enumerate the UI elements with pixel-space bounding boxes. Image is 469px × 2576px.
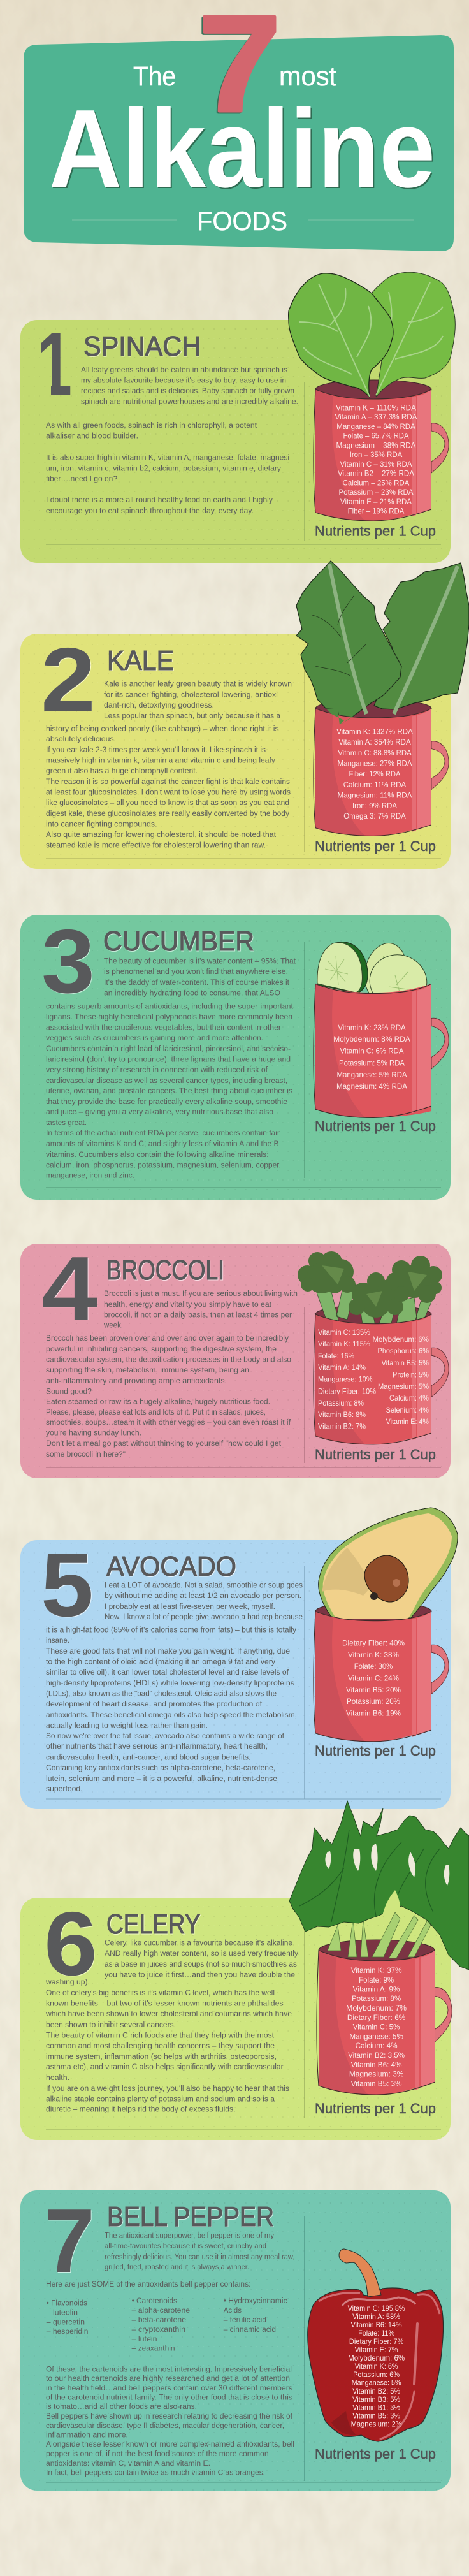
body text: AND really high water content, so is used very frequently [105,1949,299,1958]
body text: you have to juice it first…and then you have double the [105,1970,295,1979]
mug nutrient list: left column: Folate: 16% [318,1351,354,1360]
mug nutrient list: Vitamin B6: 19% [346,1709,401,1718]
mug nutrient list: Manganese: 27% RDA [338,759,412,768]
mug nutrient list: Manganese – 84% RDA [336,422,415,431]
body text [46,957,296,1180]
nutrient list: Vitamin B6: 14% [351,2320,402,2329]
number 6: 6 [44,1893,97,1995]
heading: broccoli: BROCCOLI [106,1255,224,1286]
body text: which have been shown to lower cholesterol and coumarins which have [45,2009,292,2018]
mug nutrient list: right column: Magnesium: 5% [378,1382,429,1391]
mug nutrient list: Manganese: 5% [349,2032,403,2041]
body text: I doubt there is a more all round healthy food on earth and I highly [46,495,273,504]
mug nutrient list: Omega 3: 7% RDA [343,811,406,820]
body text: antioxidants. These beneficial omega oils also help speed the metabolism, [46,1710,297,1719]
body text: is phenomenal and you won't find that anywhere else. [104,967,288,976]
body text: Broccoli is just a must. If you are serious about living with [104,1289,298,1298]
body text: steamed kale is more effective for cholesterol lowering than raw. [46,840,266,849]
body text [46,365,298,515]
mug nutrient list: Iron – 35% RDA [350,450,402,459]
body text: dant-rich, detoxifying goodness. [104,701,214,709]
mug nutrient list: Fiber: 12% RDA [349,769,400,778]
antioxidant list: carotenoids: – cryptoxanthin [132,2325,185,2334]
mug nutrient list [346,1966,407,2088]
number 3: 3 [41,911,95,1012]
body text: In terms of the actual nutrient RDA per serve, cucumbers contain fair [46,1128,280,1137]
caption: nutrients per cup: Nutrients per 1 Cup [315,838,436,854]
body text: history of being cooked poorly (like cabbage) – when done right it is [46,724,279,733]
caption: nutrients per cup: Nutrients per 1 Cup [315,2100,436,2116]
body text: health, energy and vitality you simply have to eat [104,1300,272,1309]
caption: nutrients per cup: Nutrients per 1 Cup [315,2446,436,2462]
heading: kale: KALE [107,645,174,676]
mug nutrient list: Dietary Fiber: 40% [342,1639,405,1648]
mug nutrient list [335,403,417,515]
body text: been shown to inhibit several cancers. [46,2020,176,2029]
body text: common and most challenging health concerns – they support the [46,2041,275,2050]
banner panel [24,35,454,251]
closing body text: antioxidants: vitamin C, vitamin A and vitamin E. [46,2459,210,2468]
body text: Kale is another leafy green beauty that is widely known [104,680,292,688]
mug nutrient list: Potassium: 20% [347,1697,400,1706]
closing body text: to our health cartenoids are highly researched and get a lot of attention [46,2374,290,2383]
mug nutrient list: right column: Phosphorus: 6% [377,1346,429,1355]
mug nutrient list: Vitamin C: 5% [353,2023,400,2032]
body text: my absolute favourite because it's easy to buy, easy to use in [81,376,286,385]
body text: Cucumbers contain a right load of lariciresinol, pinoresinol, and secoiso- [46,1044,291,1053]
body text: vitamins. Cucumbers also contain the following alkaline minerals: [46,1150,269,1159]
body text: lignans. These highly beneficial polyphenols have more commonly been [46,1012,292,1021]
body text: lariciresinol (don't try to pronounce), three lignans that have a huge and [46,1055,291,1064]
body text: all-time-favourites because it is sweet, crunchy and [105,2241,266,2250]
mug with celery [289,1801,469,2095]
mug nutrient list: Vitamin B2: 3.5% [348,2051,405,2060]
body text: encourage you to eat spinach throughout the day, every day. [46,506,254,515]
body text: at least four glucosinolates. I don't want to lose you here by using words [46,788,291,797]
mug nutrient list: left column: Vitamin A: 14% [318,1363,366,1372]
caption: nutrients per cup: Nutrients per 1 Cup [315,1446,436,1462]
panel background [20,1898,451,2140]
body text: anti-inflammatory and providing ample antioxidants. [46,1376,227,1385]
mug nutrient list: Vitamin B5: 20% [346,1685,401,1694]
mug nutrient list: right column: Vitamin E: 4% [386,1417,429,1426]
panel background [20,1540,451,1809]
body text: Less popular than spinach, but only because it has a [104,711,280,720]
body text: digest kale, these glucosinolates are really easily converted by the body [46,809,290,818]
body text: high-density lipoproteins (HDLs) while lowering low-density lipoproteins [46,1678,294,1687]
mug nutrient list: left column: Vitamin B6: 8% [318,1410,366,1419]
body text: tastes great. [46,1118,87,1127]
nutrient list: Vitamin A: 58% [352,2312,400,2321]
body text: Please, please, please eat lots and lots of it. Put it in salads, juices, [46,1408,266,1416]
mug nutrient list: Folate – 65.7% RDA [343,431,409,440]
mug nutrient list: Molybdenum: 8% RDA [333,1035,410,1044]
icon: cucumber slices [317,939,433,1015]
mug nutrient list: right column [372,1335,429,1426]
heading: Alkaline: Alkaline [49,86,435,210]
panel background [20,915,451,1200]
mug nutrient list: Vitamin A – 337.3% RDA [335,412,417,421]
mug nutrient list: Vitamin C: 6% RDA [340,1047,404,1056]
mug nutrient list: Magnesium: 3% [349,2070,404,2079]
body text: powerful in inhibiting cancers, supporting the digestive system, the [46,1344,277,1353]
mug nutrient list: Potassium – 23% RDA [339,488,413,497]
mug nutrient list: Magnesium – 38% RDA [336,440,415,449]
antioxidant list: carotenoids: • Carotenoids [132,2296,177,2305]
body text: veggies such as cucumbers is gaining more and more attention. [46,1033,263,1042]
mug nutrient list: right column: Calcium: 4% [389,1394,429,1402]
mug nutrient list: right column: Vitamin B5: 5% [382,1358,429,1367]
heading: The: The [133,61,176,92]
body text: diuretic – meaning it helps rid the body of excess fluids. [46,2105,236,2114]
mug nutrient list: Dietary Fiber: 6% [347,2013,406,2022]
body text: known benefits – but two of it's lesser known nutrients are phthalides [46,1999,284,2008]
body text: grilled, fried, roasted and it is always a winner. [105,2262,249,2271]
body text: very strong history of research in connection with reduced risk of [46,1065,268,1074]
body text: as a base in juices and soups (not so much smoothies as [105,1960,297,1968]
mug with cucumber [314,939,449,1117]
body text: green it also has a huge chlorophyll content. [46,766,198,775]
mug nutrient list: Magnesium: 11% RDA [338,791,412,800]
antioxidant list: carotenoids: – lutein [132,2334,157,2343]
heading: cucumber: CUCUMBER [103,926,254,957]
number 4: 4 [41,1238,97,1339]
antioxidant list: hydroxycinnamic acids: – ferulic acid [224,2315,266,2324]
number 1: 1 [37,314,72,415]
mug nutrient list: Vitamin A: 354% RDA [338,738,411,746]
antioxidant list: carotenoids: – beta-carotene [132,2315,186,2324]
panel: 4 broccoli [20,1238,451,1478]
body text: some broccoli in here?" [46,1450,126,1459]
body text: The beauty of cucumber is it's water content – 95%. That [104,957,296,966]
panel: 2 kale [20,561,469,869]
mug nutrient list: Vitamin B2 – 27% RDA [338,469,414,478]
nutrient list: Magnesium: 2% [351,2420,402,2429]
panel background [20,634,451,869]
panel: 3 cucumber [20,911,451,1200]
heading: celery: CELERY [106,1909,201,1940]
mug nutrient list: right column: Molybdenum: 6% [372,1335,429,1344]
body text: absolutely delicious. [46,734,116,743]
body text: cardiovascular system, the detoxification processes in the body and also [46,1355,291,1364]
nutrient list: Folate: 11% [358,2329,394,2338]
closing body text: of the carotenoid nutrient family. The only other food that is close to this [46,2393,292,2402]
mug nutrient list: right column: Selenium: 4% [386,1406,429,1415]
mug nutrient list: Potassium: 8% [352,1994,401,2003]
body text: broccoli, if not on a daily basis, then at least 4 times per [104,1311,292,1320]
body text: amounts of vitamins K and C, and slightly less of vitamin A and the B [46,1139,279,1148]
panel: 5 avocado [20,1508,458,1809]
nutrient list: Molybdenum: 6% [348,2354,405,2362]
body text: The antioxidant superpower, bell pepper is one of my [105,2231,275,2240]
mug with broccoli [298,1251,449,1444]
mug nutrient list: Iron: 9% RDA [352,801,397,810]
nutrient list: Vitamin K: 6% [355,2362,398,2371]
nutrient list: Vitamin B1: 3% [352,2403,400,2412]
heading: most: most [279,61,336,92]
nutrient list: Vitamin C: 195.8% [348,2304,405,2313]
mug with kale [296,561,469,836]
heading: spinach: SPINACH [83,331,201,362]
mug nutrient list: Vitamin K: 23% RDA [338,1023,406,1032]
body text: week. [103,1321,123,1330]
body text: contains superb amounts of antioxidants, including the super-important [46,1002,294,1011]
body text: actually leading to weight loss rather than gain. [46,1721,208,1730]
heading: FOODS with rules: FOODS [197,206,287,236]
mug nutrient list: Vitamin C: 88.8% RDA [338,748,412,757]
body text: These are good fats that will not make you gain weight. If anything, due [46,1647,290,1655]
antioxidant list: flavonoids: • Flavonoids [47,2299,87,2308]
body text: (LDLs), also known as the "bad" cholesterol. Oleic acid also slows the [46,1689,277,1698]
body text: All leafy greens should be eaten in abundance but spinach is [81,365,287,374]
heading: avocado: AVOCADO [106,1551,236,1582]
mug nutrient list [342,1639,405,1718]
mug nutrient list: Folate: 30% [354,1662,393,1671]
body text: As with all green foods, spinach is rich in chlorophyll, a potent [46,421,257,430]
body text: The beauty of vitamin C rich foods are that they help with the most [46,2031,275,2040]
body text: It is also super high in vitamin K, vitamin A, manganese, folate, magnesi- [46,453,292,462]
nutrient list: Vitamin B3: 5% [352,2395,400,2404]
body text: If you are on a weight loss journey, you'll also be happy to hear that this [46,2084,289,2093]
antioxidant list: carotenoids: – zeaxanthin [132,2344,175,2353]
panel: 6 celery [20,1801,469,2140]
bell pepper with nutrients [308,2249,444,2441]
body text: associated with the cruciferous vegetables, but their content in other [46,1023,281,1032]
mug nutrient list: left column: Vitamin C: 135% [318,1328,370,1337]
mug nutrient list: Calcium: 11% RDA [343,780,406,789]
body text [46,680,292,849]
closing body text [46,2365,294,2477]
number 7: 7 [44,2190,95,2292]
body text [46,1289,298,1459]
body text: Celery, like cucumber is a favourite because it's alkaline [105,1939,292,1947]
body text: it is a high-fat food (85% of it's calories come from fats) – but this is totally [46,1626,297,1634]
nutrient list [348,2304,405,2429]
mug with avocado [314,1508,458,1742]
body text: development of heart disease, and promotes the production of [46,1699,263,1708]
body text: Broccoli has been proven over and over and over again to be incredibly [46,1334,289,1343]
body text: immune system, inflammation (so helps with arthritis, osteoporosis, [46,2052,277,2061]
number 5: 5 [41,1534,94,1636]
antioxidant list: flavonoids [47,2299,89,2336]
body text: The reason it is so powerful against the cancer fight is that kale contains [46,777,290,786]
mug nutrient list: left column: Dietary Fiber: 10% [318,1387,376,1396]
closing body text: inflammation and more. [46,2431,128,2440]
body text: supporting the skin, metabolism, immune system, being an [46,1365,249,1374]
body text: other nutrients that have serious anti-inflammatory, heart health, [46,1742,268,1750]
mug nutrient list: Fiber – 19% RDA [348,506,404,515]
body text: alkaline staple contains plenty of potassium and sodium and so is a [46,2095,275,2104]
body text: health. [46,2073,69,2082]
nutrient list: Vitamin E: 7% [355,2345,398,2354]
panel background [20,1244,451,1478]
body text: So now we're over the fat issue, avocado also contains a wide range of [46,1731,285,1740]
icon: kale leaves [296,561,469,725]
mug nutrient list: left column [318,1328,376,1431]
body text: lutein, selenium and more – it is a powerful, alkaline, nutrient-dense [46,1774,277,1783]
caption: nutrients per cup: Nutrients per 1 Cup [315,1743,436,1759]
closing body text: Bell peppers have shown up in research relating to decreasing the risk of [46,2412,293,2420]
body text: Now, I know a lot of people give avocado a bad rep because [105,1612,303,1621]
caption: nutrients per cup: Nutrients per 1 Cup [315,1118,436,1134]
mug nutrient list: Magnesium: 4% RDA [336,1082,407,1091]
mug nutrient list: Vitamin C: 24% [348,1674,399,1683]
mug nutrient list: left column: Vitamin K: 115% [318,1339,370,1348]
mug nutrient list: left column: Potassium: 8% [318,1399,364,1408]
body text: Containing key antioxidants such as alpha-carotene, beta-carotene, [46,1763,275,1772]
body text: asthma etc), and vitamin C also helps significantly with cardiovascular [46,2062,284,2071]
body text: similar to olive oil), it can lower total cholesterol level and raise levels of [46,1668,289,1677]
body text: uterine, ovarian, and prostate cancers. The best thing about cucumber is [46,1086,292,1095]
icon: celery bunch [289,1801,469,1970]
closing body text: pepper is one of, if not the best food source of the more common [46,2449,269,2458]
mug nutrient list: Vitamin K – 1110% RDA [336,403,416,412]
mug nutrient list: Vitamin B5: 3% [351,2079,402,2088]
caption: nutrients per cup: Nutrients per 1 Cup [315,523,436,539]
nutrient list: Vitamin B5: 3% [352,2412,400,2420]
nutrient list: Potassium: 6% [353,2370,400,2379]
body text: massively high in vitamin k, vitamin a and vitamin c and being leafy [46,756,276,765]
mug nutrient list: Vitamin E – 21% RDA [340,497,412,506]
mug nutrient list: Vitamin K: 38% [348,1650,399,1659]
body text: by without me adding at least 1/2 an avocado per person. [105,1591,301,1600]
closing body text: In fact, bell peppers contain twice as much vitamin C as oranges. [46,2468,265,2477]
closing body text: is tomato…and all other foods are also-rans. [46,2402,197,2411]
body text: an incredibly hydrating food to consume, that ALSO [104,989,280,998]
body text: you're having sunday lunch. [46,1429,141,1437]
closing body text: Of these, the cartenoids are the most interesting. Impressively beneficial [46,2365,292,2374]
panel background [20,320,451,563]
antioxidant list: hydroxycinnamic acids: • Hydroxycinnamic [224,2296,287,2305]
title banner [24,0,454,251]
antioxidant list: flavonoids: – quercetin [47,2318,85,2327]
body text [45,1939,299,2114]
closing body text: cardiovascular disease, type II diabetes, macular degeneration, cancer, [46,2421,284,2430]
body text: Here are just SOME of the antioxidants bell pepper contains: [46,2280,250,2289]
number 2: 2 [41,629,96,731]
icon: avocado half [319,1508,458,1619]
body text [46,1581,303,1793]
mug with spinach [289,272,455,521]
body text: like glucosinolates – all you need to know is that as soon as you eat and [46,798,289,807]
mug nutrient list [336,727,413,820]
icon: bell pepper [308,2249,444,2441]
mug nutrient list: Vitamin K: 1327% RDA [336,727,413,736]
body text: to the high content of oleic acid (making it an omega 9 fat and very [46,1657,276,1666]
antioxidant list: flavonoids: – hesperidin [47,2327,89,2336]
body text: manganese, iron and zinc. [46,1171,134,1180]
body text: Also quite amazing for lowering cholesterol, it should be noted that [46,830,277,839]
nutrient list: Manganese: 5% [352,2378,401,2387]
body text: Don't let a meal go past without thinking to yourself "how could I get [46,1439,282,1448]
antioxidant list: hydroxycinnamic acids: – cinnamic acid [224,2325,276,2334]
closing body text: Alongside these lesser known or more complex-named antioxidants, bell [46,2440,294,2449]
panel: 7 bell pepper [20,2190,451,2491]
mug nutrient list: left column: Vitamin B2: 7% [318,1422,366,1431]
mug nutrient list: Manganese: 5% RDA [336,1070,407,1079]
panel background [20,2190,451,2491]
mug nutrient list: Potassium: 5% RDA [339,1059,405,1068]
closing body text: in the health field…and bell peppers contain over 30 different members [46,2383,292,2392]
nutrient list: Dietary Fiber: 7% [349,2337,404,2346]
body text [46,2231,294,2289]
nutrient list: Vitamin B2: 5% [352,2387,400,2396]
body text: into cancer fighting compounds. [46,820,157,829]
mug nutrient list: Folate: 9% [359,1976,394,1984]
body text: superfood. [46,1784,83,1793]
mug nutrient list: Molybdenum: 7% [346,2004,407,2012]
antioxidant list: flavonoids: – luteolin [47,2308,78,2317]
body text: recipes and salads and is delicious. Baby spinach or fully grown [81,386,294,395]
body text: refreshingly delicious. You can use it in almost any meal raw, [105,2252,294,2261]
body text: cardiovascular health, anti-cancer, and blood sugar benefits. [46,1753,250,1762]
antioxidant list: hydroxycinnamic acids [224,2296,287,2334]
body text: smoothies, soups…steam it with other veggies – you can even roast it if [46,1418,291,1427]
body text: cardiovascular disease as well as several cancer types, including breast, [46,1076,287,1085]
body text: alkaliser and blood builder. [46,431,138,440]
body text: I eat a LOT of avocado. Not a salad, smoothie or soup goes [105,1581,303,1590]
body text: It's the daddy of water-content. This of course makes it [104,978,290,987]
body text: insane. [46,1636,69,1645]
body text: I probably eat at least five-seven per week, myself. [105,1602,275,1611]
body text: um, iron, vitamin c, vitamin b2, calcium, potassium, vitamin e, dietary [46,464,282,473]
mug nutrient list: Vitamin C – 31% RDA [340,460,412,469]
body text: spinach are nutritional powerhouses and are incredibly alkaline. [81,397,298,405]
body text: that they provide the base for practically every alkaline soup, smoothie [46,1097,287,1106]
body text: fiber….need I go on? [46,474,117,483]
panel: 1 spinach [20,272,455,563]
antioxidant list: carotenoids [132,2296,190,2353]
body text: If you eat kale 2-3 times per week you'll know it. Like spinach it is [46,745,266,754]
body text: calcium, iron, phosphorus, potassium, magnesium, selenium, copper, [46,1161,281,1170]
mug nutrient list: Calcium – 25% RDA [343,478,409,487]
mug nutrient list: left column: Manganese: 10% [318,1375,373,1384]
mug nutrient list: Vitamin B6: 4% [351,2060,402,2069]
body text: Eaten steamed or raw its a hugely alkaline, hugely nutritious food. [46,1397,270,1406]
body text: washing up). [45,1977,90,1986]
icon: broccoli florets [298,1251,442,1329]
antioxidant list: carotenoids: – alpha-carotene [132,2306,190,2315]
mug nutrient list: Vitamin A: 9% [353,1985,400,1994]
body text: One of celery's big benefits is it's vitamin C level, which has the well [46,1988,275,1997]
mug nutrient list: Calcium: 4% [356,2041,398,2050]
body text: for its cancer-fighting, cholesterol-lowering, antioxi- [104,690,280,699]
mug nutrient list [333,1023,410,1091]
mug nutrient list: right column: Protein: 5% [393,1371,429,1379]
body text: and juice – giving you a very alkaline, very nutritious base that also [46,1107,273,1116]
antioxidant list: hydroxycinnamic acids: Acids [224,2306,242,2315]
body text: Sound good? [46,1387,92,1396]
heading: bell pepper: BELL PEPPER [107,2201,274,2232]
icon: spinach leaves [289,272,455,397]
mug nutrient list: Vitamin K: 37% [351,1966,402,1975]
